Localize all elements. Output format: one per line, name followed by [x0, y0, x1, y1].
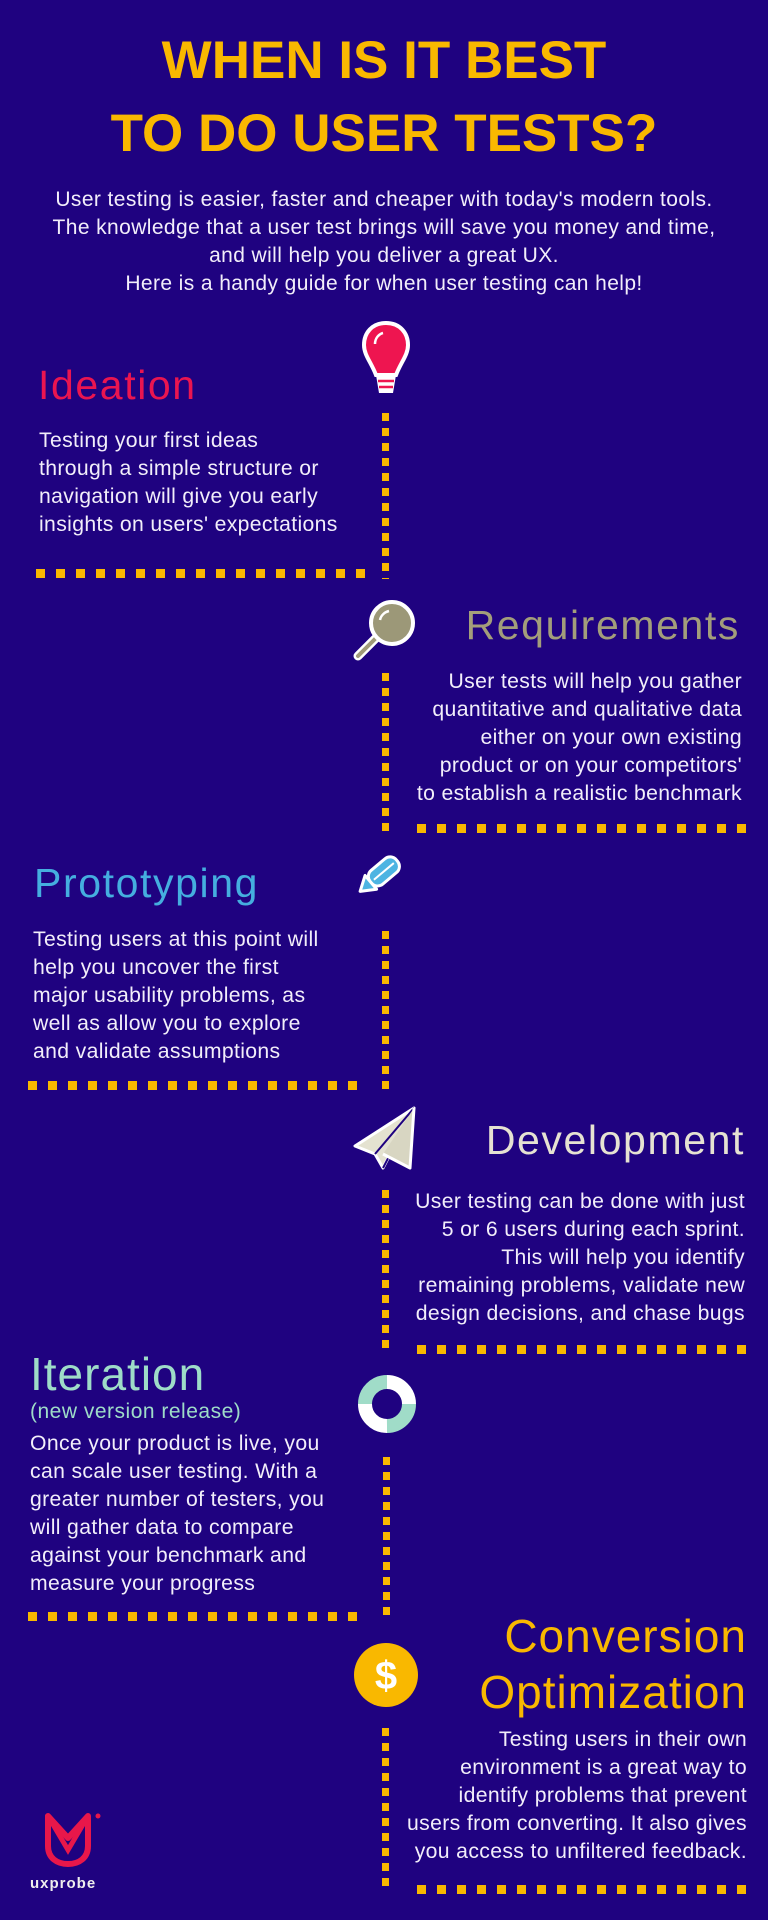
- text: Prototyping: major usability problems, as: [33, 984, 305, 1007]
- intro text: and will help you deliver a great UX.: [209, 244, 559, 267]
- text: Development: This will help you identify: [501, 1246, 745, 1269]
- text: Ideation: navigation will give you early: [39, 485, 318, 508]
- title: TO DO USER TESTS?: [111, 104, 657, 163]
- heading: Requirements: Requirements: [466, 602, 740, 648]
- heading: Prototyping: Prototyping: [34, 860, 259, 906]
- title: [111, 31, 657, 163]
- text: Iteration: Once your product is live, you: [30, 1432, 320, 1455]
- text: Development: 5 or 6 users during each sprint.: [442, 1218, 745, 1241]
- icon: paper plane: [353, 1106, 416, 1170]
- text: Ideation: insights on users' expectations: [39, 513, 338, 536]
- text: Iteration: greater number of testers, you: [30, 1488, 324, 1511]
- heading: Conversion Optimization: Conversion: [504, 1610, 747, 1662]
- heading: Conversion Optimization: Optimization: [479, 1666, 747, 1718]
- text: Iteration: [30, 1432, 324, 1595]
- text: Ideation: through a simple structure or: [39, 457, 319, 480]
- text: Prototyping: well as allow you to explore: [33, 1012, 301, 1035]
- text: Conversion: Testing users in their own: [499, 1728, 747, 1751]
- text: Iteration: measure your progress: [30, 1572, 255, 1595]
- text: Conversion: [407, 1728, 747, 1863]
- text: Iteration: will gather data to compare: [30, 1516, 294, 1539]
- text: Requirements: quantitative and qualitative data: [432, 698, 742, 721]
- text: Conversion: environment is a great way to: [460, 1756, 747, 1779]
- text: Development: [415, 1190, 745, 1325]
- text: Ideation: [39, 429, 338, 536]
- heading: Iteration: (new version release): [30, 1400, 241, 1423]
- logo: uxprobe: uxprobe: [30, 1875, 96, 1892]
- text: Prototyping: Testing users at this point will: [33, 928, 319, 951]
- heading: Conversion Optimization: [479, 1610, 747, 1718]
- intro text: User testing is easier, faster and cheaper with today's modern tools.: [55, 188, 713, 211]
- text: Prototyping: help you uncover the first: [33, 956, 279, 979]
- heading: Iteration: Iteration: [30, 1348, 205, 1400]
- text: Development: remaining problems, validate new: [418, 1274, 745, 1297]
- heading: Ideation: Ideation: [38, 362, 197, 408]
- text: Iteration: against your benchmark and: [30, 1544, 306, 1567]
- intro text: Here is a handy guide for when user testing can help!: [125, 272, 643, 295]
- icon: cycle arrows: [358, 1375, 416, 1433]
- text: Iteration: can scale user testing. With a: [30, 1460, 317, 1483]
- title: WHEN IS IT BEST: [162, 31, 606, 90]
- heading: Development: Development: [486, 1117, 745, 1163]
- icon: light bulb: [362, 321, 410, 393]
- text: Development: User testing can be done with just: [415, 1190, 745, 1213]
- icon: magnifier: [354, 600, 415, 660]
- icon: dollar coin: [354, 1643, 418, 1707]
- text: Development: design decisions, and chase bugs: [416, 1302, 745, 1325]
- text: Requirements: [417, 670, 742, 805]
- text: Requirements: User tests will help you gather: [449, 670, 742, 693]
- text: Prototyping: and validate assumptions: [33, 1040, 280, 1063]
- icon: dollar coin: $: [375, 1654, 397, 1698]
- text: Conversion: you access to unfiltered feedback.: [415, 1840, 747, 1863]
- text: Requirements: either on your own existing: [480, 726, 742, 749]
- intro text: The knowledge that a user test brings will save you money and time,: [53, 216, 715, 239]
- text: Requirements: product or on your competitors': [440, 754, 742, 777]
- text: Conversion: identify problems that prevent: [459, 1784, 747, 1807]
- text: Conversion: users from converting. It also gives: [407, 1812, 747, 1835]
- text: Requirements: to establish a realistic benchmark: [417, 782, 742, 805]
- logo: uxprobe: [30, 1813, 100, 1892]
- text: Ideation: Testing your first ideas: [39, 429, 258, 452]
- intro text: [52, 188, 715, 295]
- heading: Iteration: [30, 1348, 241, 1423]
- text: Prototyping: [33, 928, 319, 1063]
- icon: pencil: [358, 855, 401, 893]
